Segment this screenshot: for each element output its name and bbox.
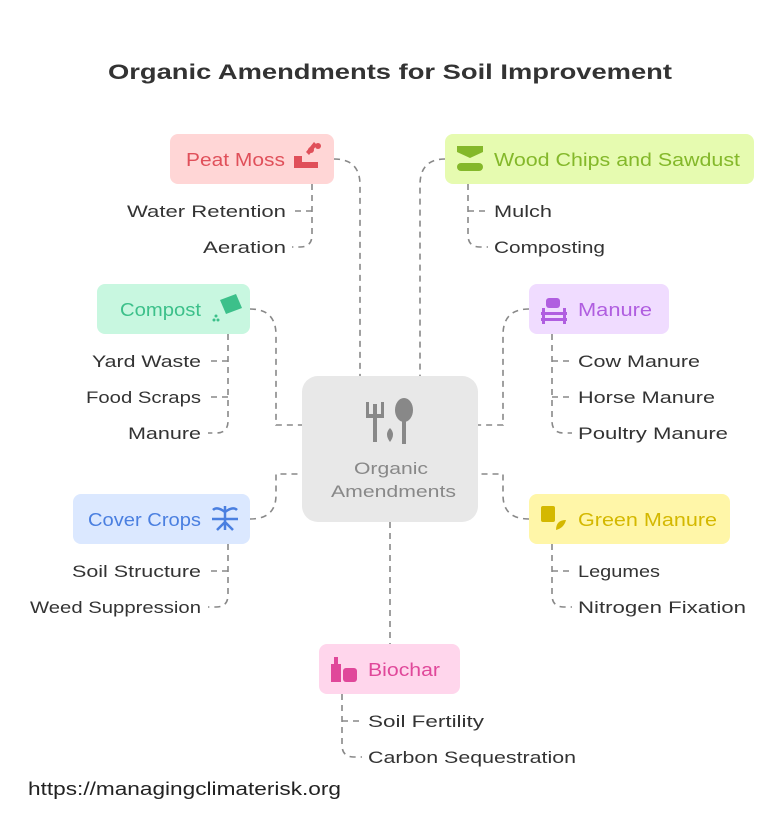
children: Peat Moss: Aeration [203,238,286,257]
center node: Amendments [331,482,456,501]
children: Manure: Poultry Manure [578,424,728,443]
children: Manure: Cow Manure [578,352,700,371]
children: Biochar: Soil Fertility [368,712,485,731]
node: Manure [529,284,669,334]
node: Cover Crops: Cover Crops [88,510,201,530]
children: Cover Crops: Weed Suppression [30,598,201,617]
node: Compost: Compost [120,300,201,320]
footer url: https://managingclimaterisk.org [28,779,341,799]
children: Wood Chips [494,202,605,257]
node: Biochar [319,644,460,694]
node: Manure: Manure [578,300,652,320]
children: Biochar: Carbon Sequestration [368,748,576,767]
children: Peat Moss [127,202,286,257]
center node [302,376,478,522]
children: Peat Moss: Water Retention [127,202,286,221]
children: Cover Crops [30,562,201,617]
children: Cover Crops: Soil Structure [72,562,201,581]
children: Green Manure [578,562,746,617]
children: Compost: Yard Waste [92,352,201,371]
node: Peat Moss [170,134,334,184]
node: Wood Chips: Wood Chips and Sawdust [494,150,740,170]
children: Green Manure: Legumes [578,562,660,581]
node: Compost [97,284,250,334]
children: Biochar [368,712,576,767]
node: Green Manure [529,494,730,544]
children: Manure [578,352,728,443]
children: Wood Chips: Composting [494,238,605,257]
center node: Organic [354,459,429,478]
children: Compost: Food Scraps [86,388,201,407]
node: Green Manure: Green Manure [578,510,717,530]
title: Organic Amendments for Soil Improvement [108,61,672,84]
children: Green Manure: Nitrogen Fixation [578,598,746,617]
node: Cover Crops [73,494,250,544]
node: Wood Chips [445,134,754,184]
connectors [208,159,572,757]
icon: fork spoon plant [366,398,413,444]
children: Manure: Horse Manure [578,388,715,407]
children: Wood Chips: Mulch [494,202,552,221]
node: Peat Moss: Peat Moss [186,150,285,170]
node: Biochar: Biochar [368,660,440,680]
children: Compost: Manure [128,424,201,443]
children: Compost [86,352,201,443]
